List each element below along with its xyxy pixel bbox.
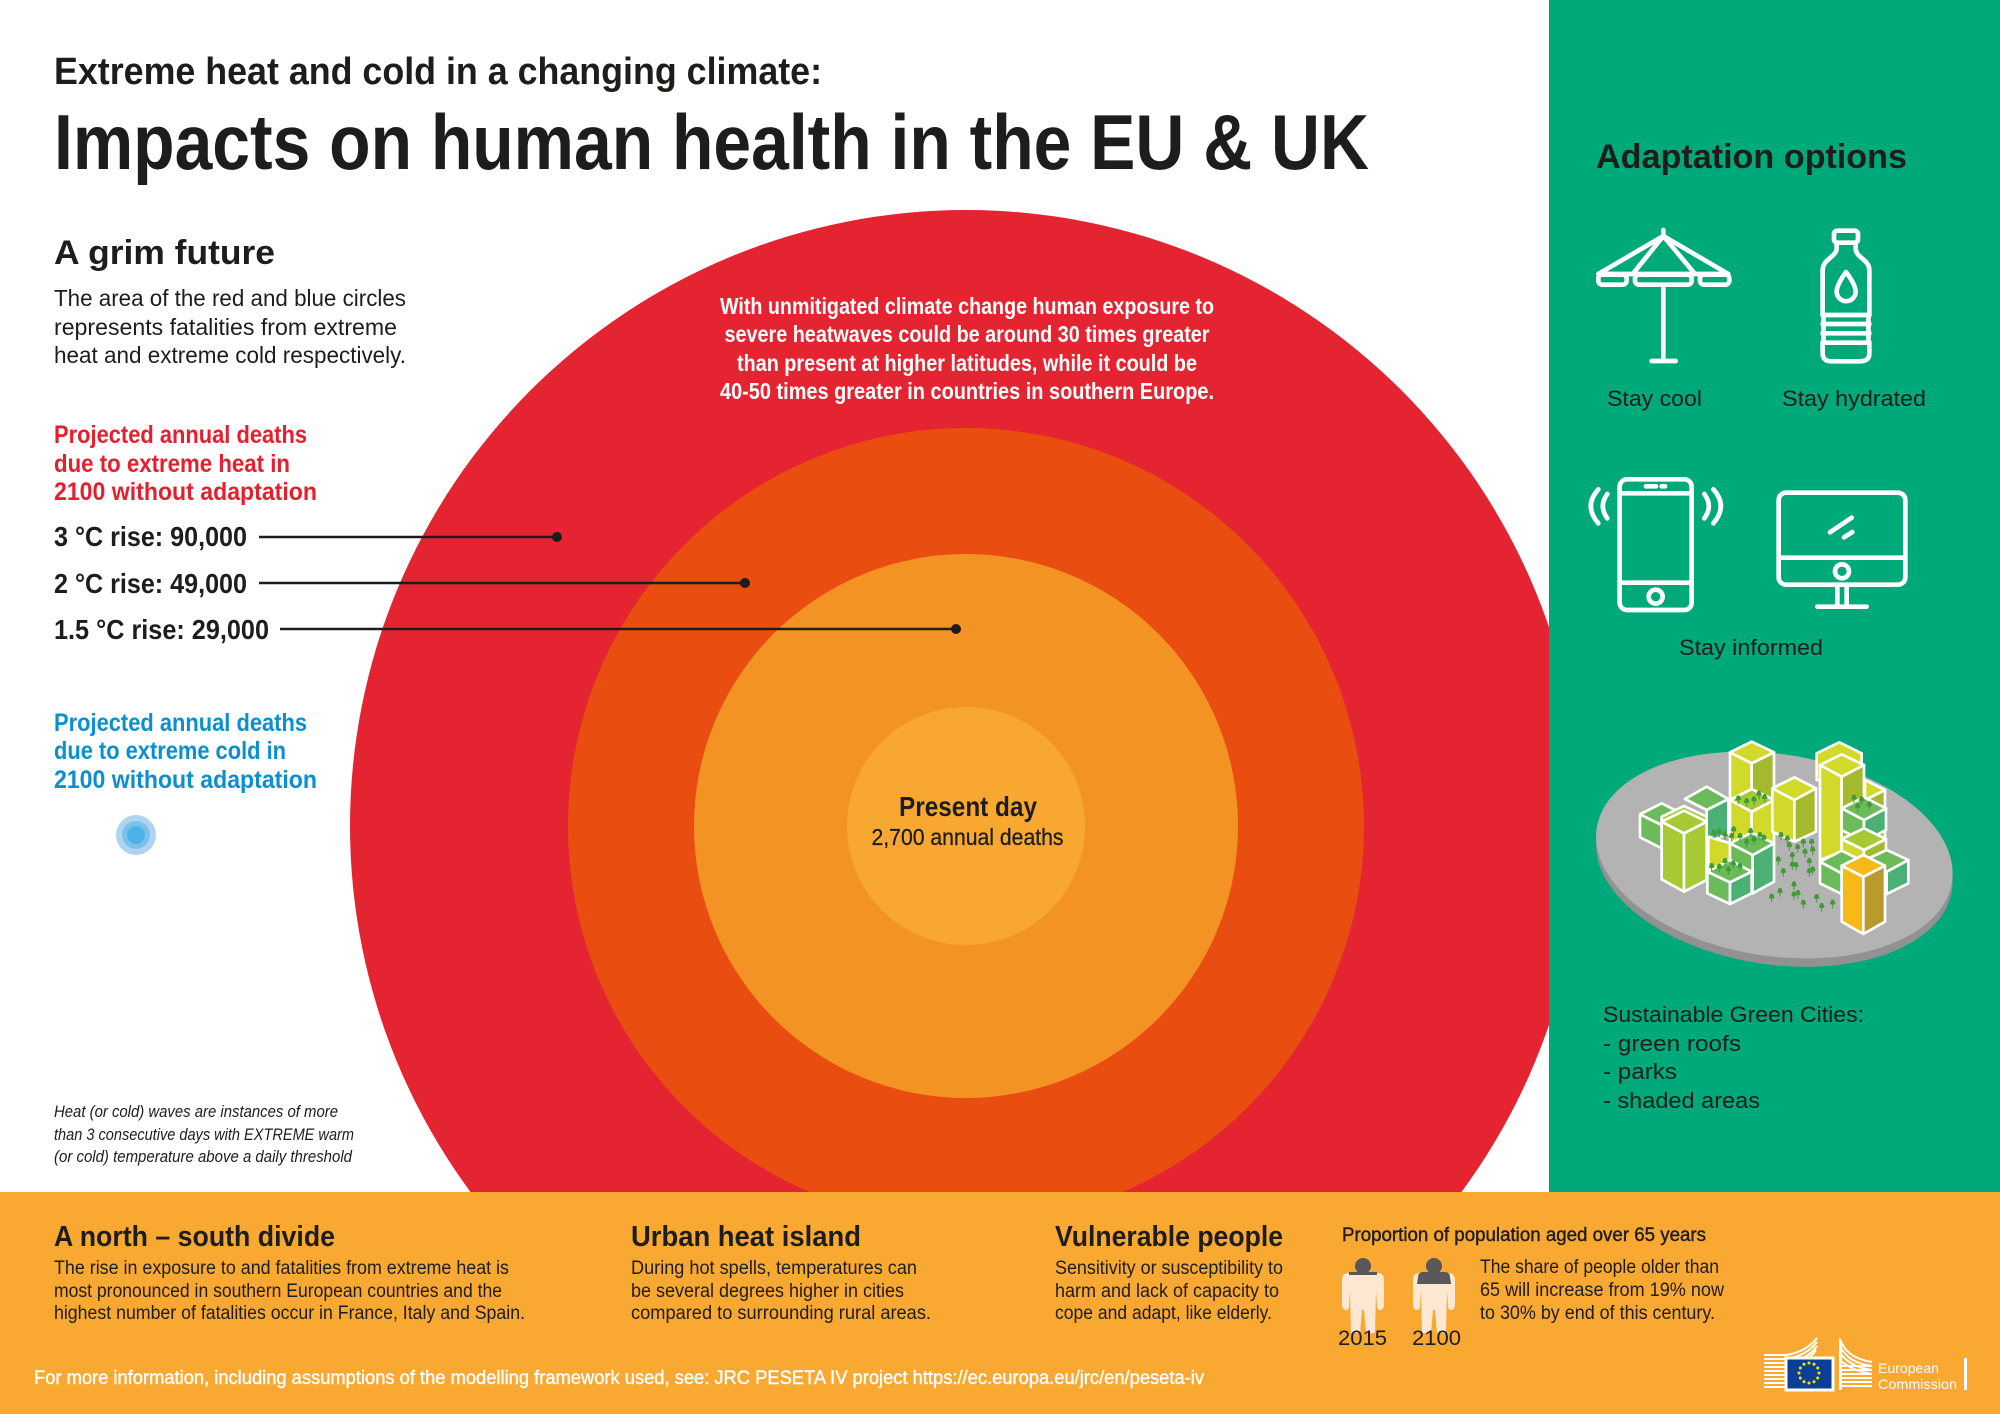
chart: concentric heat fatality circles: [350, 210, 1582, 1414]
illustration: sustainable green city: [1582, 728, 1967, 990]
text block: projected deaths from cold: Projected annual deaths: [54, 709, 307, 737]
logo: European Commission: European: [1878, 1360, 1939, 1376]
callout: 1.5 °C rise: 1.5 °C rise: 29,000: [54, 614, 269, 645]
chart: blue cold deaths circle: [116, 815, 156, 855]
icon: desktop monitor: [1779, 493, 1905, 607]
text block: urban heat island: During hot spells, temperatures can: [631, 1258, 917, 1279]
icon: parasol: [1598, 230, 1729, 361]
text block: vulnerable people: harm and lack of capacity to: [1055, 1281, 1279, 1302]
text block: urban heat island: Urban heat island: [631, 1221, 861, 1253]
footnote: heat wave definition: [54, 1102, 354, 1166]
circle: present day, 2,700 deaths: [847, 707, 1085, 945]
text block: north-south divide: [54, 1221, 525, 1324]
text block: exposure statement inside red circle: With unmitigated climate change human exposure to: [720, 293, 1214, 319]
icon: water bottle: [1823, 231, 1869, 361]
paragraph: circle explanation: represents fatalities from extreme: [54, 314, 397, 340]
callout: 2 °C rise: [54, 568, 750, 599]
icon: person 2015: [1342, 1258, 1384, 1333]
circle: 2 °C rise, 49,000 deaths: [568, 428, 1364, 1224]
logo: European Commission: [1764, 1337, 1966, 1392]
footnote: heat wave definition: than 3 consecutive days with EXTREME warm: [54, 1125, 354, 1144]
text block: sustainable green cities: [1603, 1002, 1864, 1113]
text: more information footer: For more information, including assumptions of the modelling framework used, see: JRC PESETA IV project https://ec.europa.eu/jrc/en/peseta-iv: [34, 1368, 1204, 1389]
panel: bottom band: [0, 1192, 2000, 1414]
callout: 3 °C rise: [54, 521, 562, 552]
text block: share of older people: 65 will increase from 19% now: [1480, 1280, 1724, 1301]
text block: share of older people: The share of people older than: [1480, 1257, 1719, 1278]
text block: vulnerable people: cope and adapt, like elderly.: [1055, 1303, 1272, 1324]
text block: sustainable green cities: - green roofs: [1603, 1031, 1741, 1056]
text block: projected deaths from heat: due to extreme heat in: [54, 450, 290, 478]
circle: 1.5 °C rise, 29,000 deaths: [694, 554, 1238, 1098]
paragraph: circle explanation: heat and extreme cold respectively.: [54, 342, 406, 368]
text block: north-south divide: most pronounced in southern European countries and the: [54, 1281, 502, 1302]
label: stay hydrated: Stay hydrated: [1782, 386, 1926, 411]
callout: 1.5 °C rise: [54, 614, 961, 645]
circle: 3 °C rise, 90,000 deaths: [350, 210, 1582, 1414]
heading: proportion over 65: Proportion of population aged over 65 years: [1342, 1225, 1706, 1246]
text block: urban heat island: compared to surrounding rural areas.: [631, 1303, 931, 1324]
paragraph: circle explanation: The area of the red and blue circles: [54, 285, 406, 311]
text block: exposure statement inside red circle: 40-50 times greater in countries in southern Europe.: [720, 378, 1214, 404]
logo: European Commission: Commission: [1878, 1376, 1957, 1392]
text block: a grim future: [54, 234, 406, 368]
icon: smartphone: [1591, 479, 1721, 610]
callout: 3 °C rise: 3 °C rise: 90,000: [54, 521, 247, 552]
label: 2015: 2015: [1338, 1327, 1387, 1350]
text block: exposure statement inside red circle: severe heatwaves could be around 30 times greater: [724, 321, 1210, 347]
text block: sustainable green cities: Sustainable Green Cities:: [1603, 1002, 1864, 1027]
text block: north-south divide: The rise in exposure to and fatalities from extreme heat is: [54, 1258, 509, 1279]
footnote: heat wave definition: (or cold) temperature above a daily threshold: [54, 1147, 352, 1166]
text block: vulnerable people: Sensitivity or susceptibility to: [1055, 1258, 1283, 1279]
text block: projected deaths from heat: 2100 without adaptation: [54, 478, 317, 506]
callout: 2 °C rise: 2 °C rise: 49,000: [54, 568, 247, 599]
heading: a grim future: A grim future: [54, 234, 275, 272]
label: present day: [872, 791, 1064, 850]
text block: share of older people: to 30% by end of this century.: [1480, 1303, 1715, 1324]
panel: adaptation options: [1549, 0, 2000, 1193]
text block: sustainable green cities: - shaded areas: [1603, 1088, 1760, 1113]
text block: exposure statement inside red circle: than present at higher latitudes, while it could be: [737, 350, 1197, 376]
text block: north-south divide: A north – south divide: [54, 1221, 335, 1253]
text block: projected deaths from cold: due to extreme cold in: [54, 737, 286, 765]
text block: exposure statement inside red circle: [720, 293, 1214, 404]
label: present day: 2,700 annual deaths: [872, 824, 1064, 850]
text block: sustainable green cities: - parks: [1603, 1059, 1677, 1084]
label: present day: Present day: [899, 791, 1037, 822]
label: stay cool: Stay cool: [1607, 386, 1702, 411]
label: 2100: 2100: [1412, 1327, 1461, 1350]
footnote: heat wave definition: Heat (or cold) waves are instances of more: [54, 1102, 338, 1121]
icon: person 2100: [1413, 1258, 1455, 1333]
text block: projected deaths from cold: [54, 709, 317, 794]
heading: adaptation options: Adaptation options: [1596, 138, 1907, 176]
text block: share of older people: [1480, 1257, 1724, 1324]
paragraph: circle explanation: [54, 285, 406, 368]
text block: vulnerable people: [1055, 1221, 1283, 1324]
heading: kicker title: Extreme heat and cold in a changing climate:: [54, 51, 822, 93]
text block: north-south divide: highest number of fatalities occur in France, Italy and Spain.: [54, 1303, 525, 1324]
text block: vulnerable people: Vulnerable people: [1055, 1221, 1283, 1253]
text block: urban heat island: be several degrees higher in cities: [631, 1281, 904, 1302]
text block: urban heat island: [631, 1221, 931, 1324]
label: stay informed: Stay informed: [1679, 635, 1823, 660]
text block: projected deaths from heat: [54, 421, 317, 506]
text block: projected deaths from heat: Projected annual deaths: [54, 421, 307, 449]
text block: projected deaths from cold: 2100 without adaptation: [54, 766, 317, 794]
heading: main title: Impacts on human health in the EU & UK: [54, 98, 1369, 186]
